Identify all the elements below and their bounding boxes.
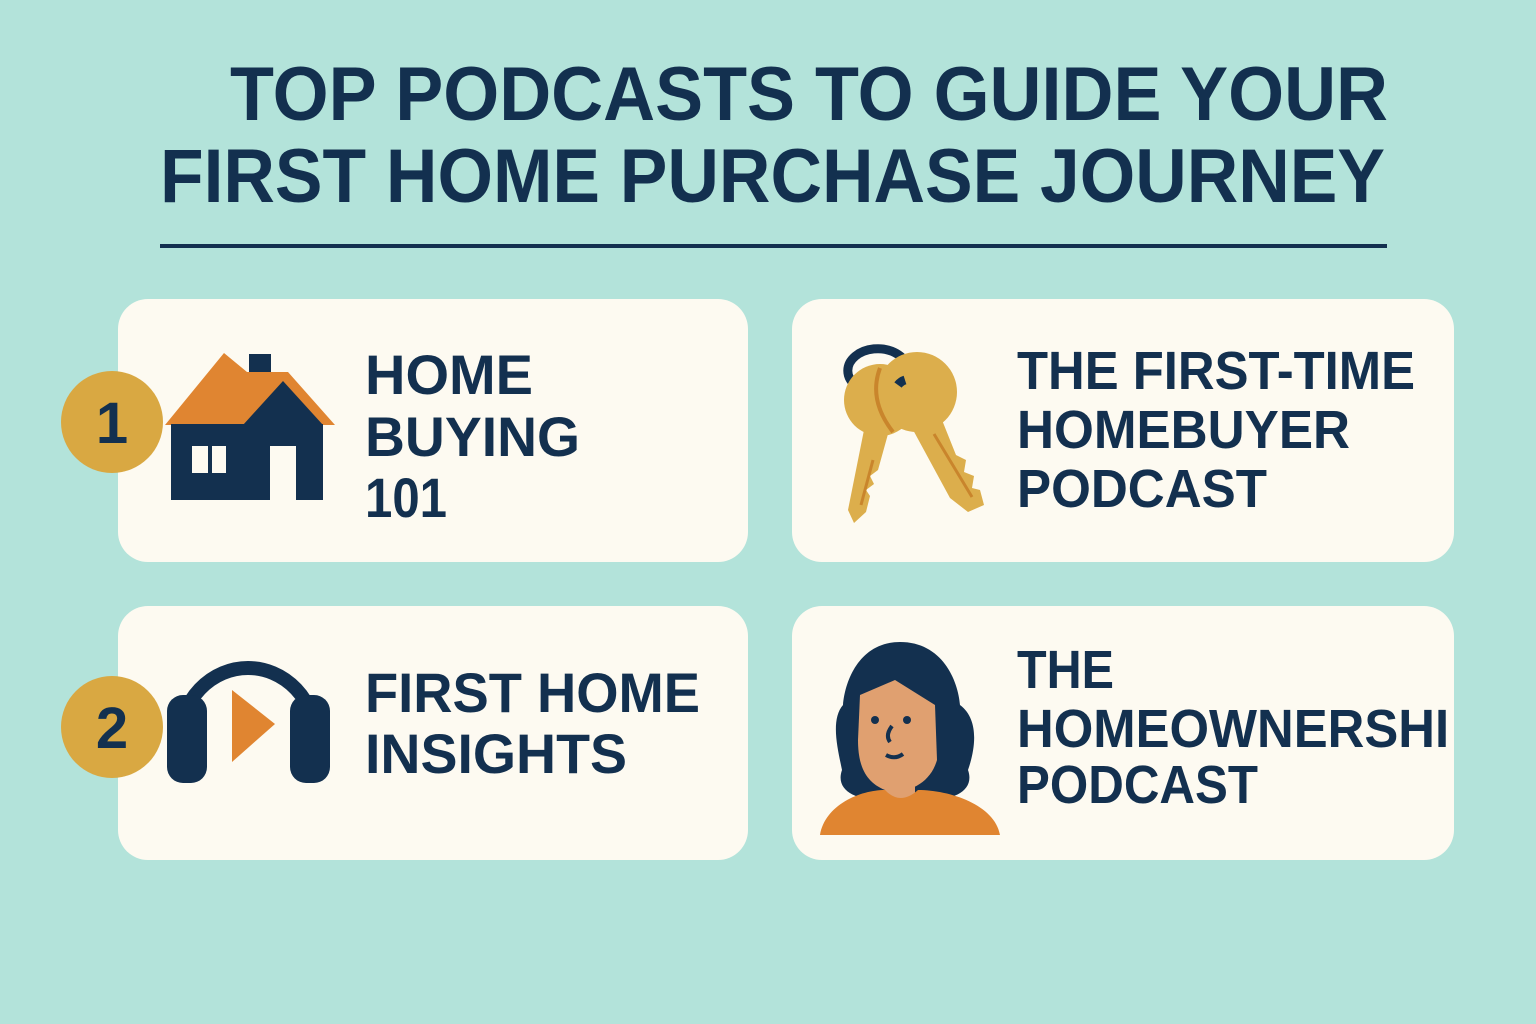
text: homeownership podcast: HOMEOWNERSHIP xyxy=(1017,699,1483,759)
title: TOP PODCASTS TO GUIDE YOUR xyxy=(230,52,1388,137)
text: first-time homebuyer podcast: HOMEBUYER xyxy=(1017,400,1350,460)
text: homeownership podcast: PODCAST xyxy=(1017,755,1258,815)
text: first home insights: FIRST HOME xyxy=(365,661,700,724)
panel: first-time homebuyer podcast xyxy=(792,299,1454,562)
badge 1: 1 xyxy=(96,391,128,456)
icon: person xyxy=(820,642,1000,835)
icon: headphones xyxy=(167,668,330,783)
badge 2: 2 xyxy=(96,696,128,761)
badge 1 xyxy=(61,371,163,473)
text: homeownership podcast xyxy=(1018,650,1446,804)
title: FIRST HOME PURCHASE JOURNEY xyxy=(160,134,1385,219)
text: first-time homebuyer podcast: THE FIRST-TIME xyxy=(1017,341,1415,401)
panel: home buying 101 xyxy=(61,299,748,562)
text: home buying 101: HOME xyxy=(365,343,533,406)
icon: keys xyxy=(844,349,984,523)
text: first home insights xyxy=(365,661,700,785)
badge 2 xyxy=(61,676,163,778)
text: home buying 101 xyxy=(365,343,580,529)
text: first home insights: INSIGHTS xyxy=(365,722,627,785)
text: home buying 101: BUYING xyxy=(365,405,580,468)
text: homeownership podcast: THE xyxy=(1017,640,1114,700)
panel: homeownership podcast xyxy=(792,606,1483,860)
icon: house xyxy=(165,353,335,500)
text: home buying 101: 101 xyxy=(365,466,447,529)
text: first-time homebuyer podcast: PODCAST xyxy=(1017,459,1267,519)
panel: first home insights xyxy=(61,606,748,860)
title xyxy=(160,52,1388,219)
text: first-time homebuyer podcast xyxy=(1017,341,1415,519)
